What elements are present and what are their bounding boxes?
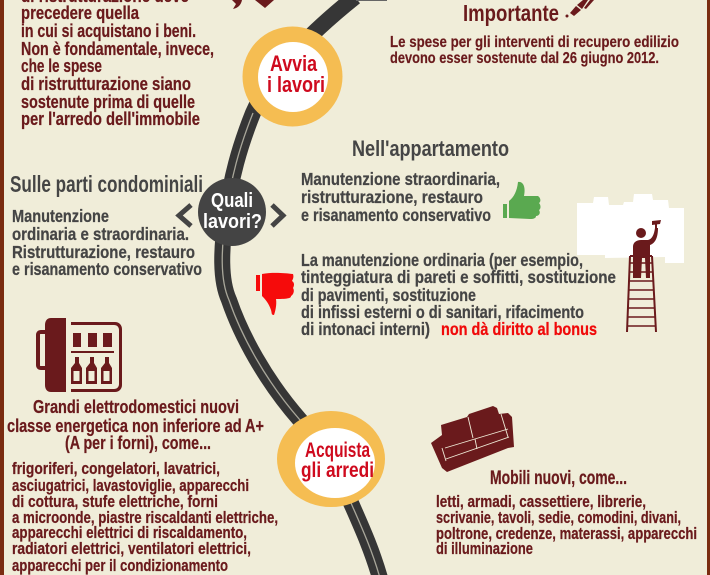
text block: excluded works: tinteggiatura di pareti e soffitti, sostituzione <box>301 267 616 287</box>
text block: excluded works: di infissi esterni o di sanitari, rifacimento <box>301 302 584 322</box>
text block: excluded works: di pavimenti, sostituzione <box>301 285 476 305</box>
text block: condominium list: Manutenzione <box>12 206 109 226</box>
text block: timing of purchases: in cui si acquistano i beni. <box>21 21 196 41</box>
badge: Acquista gli arredi <box>277 411 385 507</box>
text block: furniture list: di illuminazione <box>436 539 533 558</box>
text block: appliance list: frigoriferi, congelatori, lavatrici, <box>12 459 220 478</box>
panel: appliances <box>7 396 278 575</box>
badge: Quali lavori?: Quali <box>211 190 253 212</box>
figure <box>633 220 661 278</box>
heading: large appliances: Grandi elettrodomestici nuovi <box>33 396 239 417</box>
heading: large appliances: classe energetica non inferiore ad A+ <box>7 415 264 436</box>
text block: excluded works: La manutenzione ordinaria (per esempio, <box>301 250 583 270</box>
text block: furniture list <box>436 492 697 558</box>
icon: fridge <box>36 318 122 392</box>
arrow: left <box>179 205 191 226</box>
icon: white painted wall <box>577 194 684 263</box>
text block: timing of purchases: per l'arredo dell'immobile <box>21 109 200 129</box>
panel: apartment works <box>301 136 616 339</box>
icon: pen <box>566 0 594 18</box>
heading: Nell'appartamento: Nell'appartamento <box>352 136 509 161</box>
top fragment bar <box>356 0 387 1</box>
heading: Mobili nuovi: Mobili nuovi, come... <box>490 468 627 489</box>
text block: appliance list: a microonde, piastre riscaldanti elettriche, <box>12 508 278 527</box>
text block: appliance list: apparecchi elettrici di riscaldamento, <box>12 523 247 542</box>
badge: Avvia i lavori <box>242 26 342 126</box>
heading: large appliances <box>7 396 264 453</box>
text block: allowed works: ristrutturazione, restauro <box>301 187 483 207</box>
text block: appliance list: radiatori elettrici, ventilatori elettrici, <box>12 539 251 558</box>
icon: sofa <box>431 406 514 472</box>
text block: condominium list <box>12 206 202 279</box>
text block: furniture list: letti, armadi, cassettiere, librerie, <box>436 492 646 511</box>
badge: Quali lavori? <box>198 178 266 246</box>
text block: timing of purchases: precedere quella <box>21 3 140 23</box>
text block: condominium list: ordinaria e straordinaria. <box>12 224 189 244</box>
text block: excluded works <box>301 250 616 339</box>
heading: Importante: Importante <box>463 0 559 26</box>
icon: thumb down <box>256 273 294 315</box>
text block: excluded works: di intonaci interni) <box>301 319 430 339</box>
heading: large appliances: (A per i forni), come... <box>65 432 211 453</box>
text block: allowed works: e risanamento conservativo <box>301 205 491 225</box>
text block: appliance list: asciugatrici, lavastoviglie, apparecchi <box>12 476 249 495</box>
badge: Avvia i lavori: Avvia <box>270 51 318 76</box>
text block: Importante note <box>390 34 679 67</box>
top-left fragment icon <box>232 0 274 9</box>
ladder <box>627 256 656 332</box>
text block: appliance list: apparecchi per il condizionamento <box>12 556 228 575</box>
panel: condominium works <box>10 171 203 279</box>
text block: allowed works <box>301 169 500 225</box>
text block: appliance list: di cottura, stufe elettriche, forni <box>12 492 218 511</box>
road <box>222 0 380 575</box>
panel: furniture <box>436 468 697 558</box>
text block: allowed works: Manutenzione straordinaria, <box>301 169 500 189</box>
badge: Avvia i lavori: i lavori <box>267 72 325 97</box>
text block: timing of purchases <box>21 0 214 129</box>
icon: thumb up <box>503 182 540 219</box>
arrow: right <box>272 205 283 226</box>
badge: Acquista gli arredi: gli arredi <box>301 459 374 482</box>
text block: condominium list: e risanamento conservativo <box>12 259 202 279</box>
badge: Quali lavori?: lavori? <box>203 211 262 233</box>
text block: timing of purchases: di ristrutturazione siano <box>21 74 191 94</box>
badge: Acquista gli arredi: Acquista <box>305 439 370 462</box>
icon: painter on ladder <box>627 220 661 332</box>
text block: timing of purchases: che le spese <box>21 56 102 76</box>
text block: condominium list: Ristrutturazione, restauro <box>12 242 195 262</box>
heading: Sulle parti condominiali: Sulle parti condominiali <box>10 171 203 197</box>
text block: excluded works: non dà diritto al bonus <box>441 319 597 339</box>
text block: appliance list <box>12 459 278 575</box>
text block: timing of purchases: sostenute prima di quelle <box>21 92 195 112</box>
text block: timing of purchases: Non è fondamentale, invece, <box>21 39 214 59</box>
